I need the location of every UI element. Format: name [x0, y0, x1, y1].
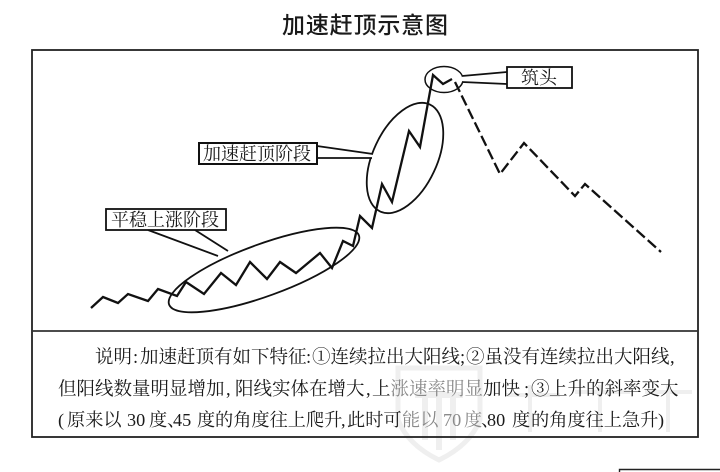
- explanation line 3: (: [58, 410, 64, 431]
- explanation line 1: 加速赶顶有如下特征: [140, 347, 307, 368]
- explanation line 1: ①连续拉出大阳线: [312, 347, 461, 368]
- explanation line 2: 阳线实体在增大: [235, 379, 365, 400]
- explanation line 3: 度: [512, 410, 530, 430]
- explanation line 3: 能以: [402, 410, 439, 430]
- callout: steady rise stage: [106, 209, 228, 256]
- main frame: [32, 50, 698, 437]
- explanation line 2: 涨速率明显加快: [391, 380, 520, 400]
- explanation line 3: 30: [127, 410, 145, 430]
- explanation line 3: 度: [197, 410, 215, 430]
- explanation line 1: ;: [460, 348, 465, 368]
- explanation line 2: ,: [366, 380, 371, 400]
- explanation line 3: 70: [443, 410, 461, 430]
- frame divider: [32, 330, 698, 332]
- explanation text block: [58, 347, 679, 431]
- explanation line 3: 45: [173, 410, 191, 430]
- callout: top formation: [462, 67, 572, 88]
- explanation line 3: 度: [149, 410, 167, 430]
- explanation line 1: :: [306, 348, 311, 368]
- explanation line 3: 此时可: [347, 410, 402, 430]
- callout: acceleration stage: [199, 143, 373, 164]
- explanation line 3: 度: [464, 410, 482, 430]
- chart: price line rising: [91, 75, 452, 308]
- explanation line 3: 80: [487, 410, 505, 430]
- explanation line 3: 的角度往上爬升: [215, 410, 342, 430]
- explanation line 3: 的角度往上急升: [531, 410, 658, 430]
- explanation line 3: 、: [167, 410, 185, 430]
- explanation line 3: 、: [481, 410, 499, 430]
- explanation line 2: 上升的斜率变大: [549, 379, 679, 400]
- title: 加速赶顶示意图: [282, 12, 448, 38]
- cropped box at lower edge: [620, 470, 720, 472]
- explanation line 3: ): [658, 410, 664, 431]
- explanation line 2: ,: [226, 380, 231, 400]
- callout: steady rise stage: 平稳上涨阶段: [111, 210, 219, 230]
- ellipse: steady rise stage: [160, 211, 368, 329]
- explanation line 2: 但阳线数量明显增加: [58, 379, 225, 400]
- explanation line 3: ,: [341, 410, 346, 430]
- callout: acceleration stage: 加速赶顶阶段: [203, 144, 311, 164]
- watermark: faint shield and marks: [398, 368, 692, 460]
- explanation line 2: ③: [531, 379, 550, 400]
- callout: top formation: 筑头: [521, 68, 558, 88]
- explanation line 2: 上: [372, 379, 391, 400]
- ellipse: top formation: [425, 66, 463, 92]
- explanation line 2: ;: [524, 380, 529, 400]
- explanation line 1: :: [133, 348, 138, 368]
- explanation line 1: 说明: [95, 347, 132, 368]
- chart: projected decline dashed line: [455, 82, 661, 252]
- explanation line 1: ②虽没有连续拉出大阳线: [466, 347, 670, 368]
- explanation line 3: 原来以: [67, 410, 122, 430]
- ellipse: acceleration stage: [351, 91, 459, 225]
- explanation line 1: ,: [670, 348, 675, 368]
